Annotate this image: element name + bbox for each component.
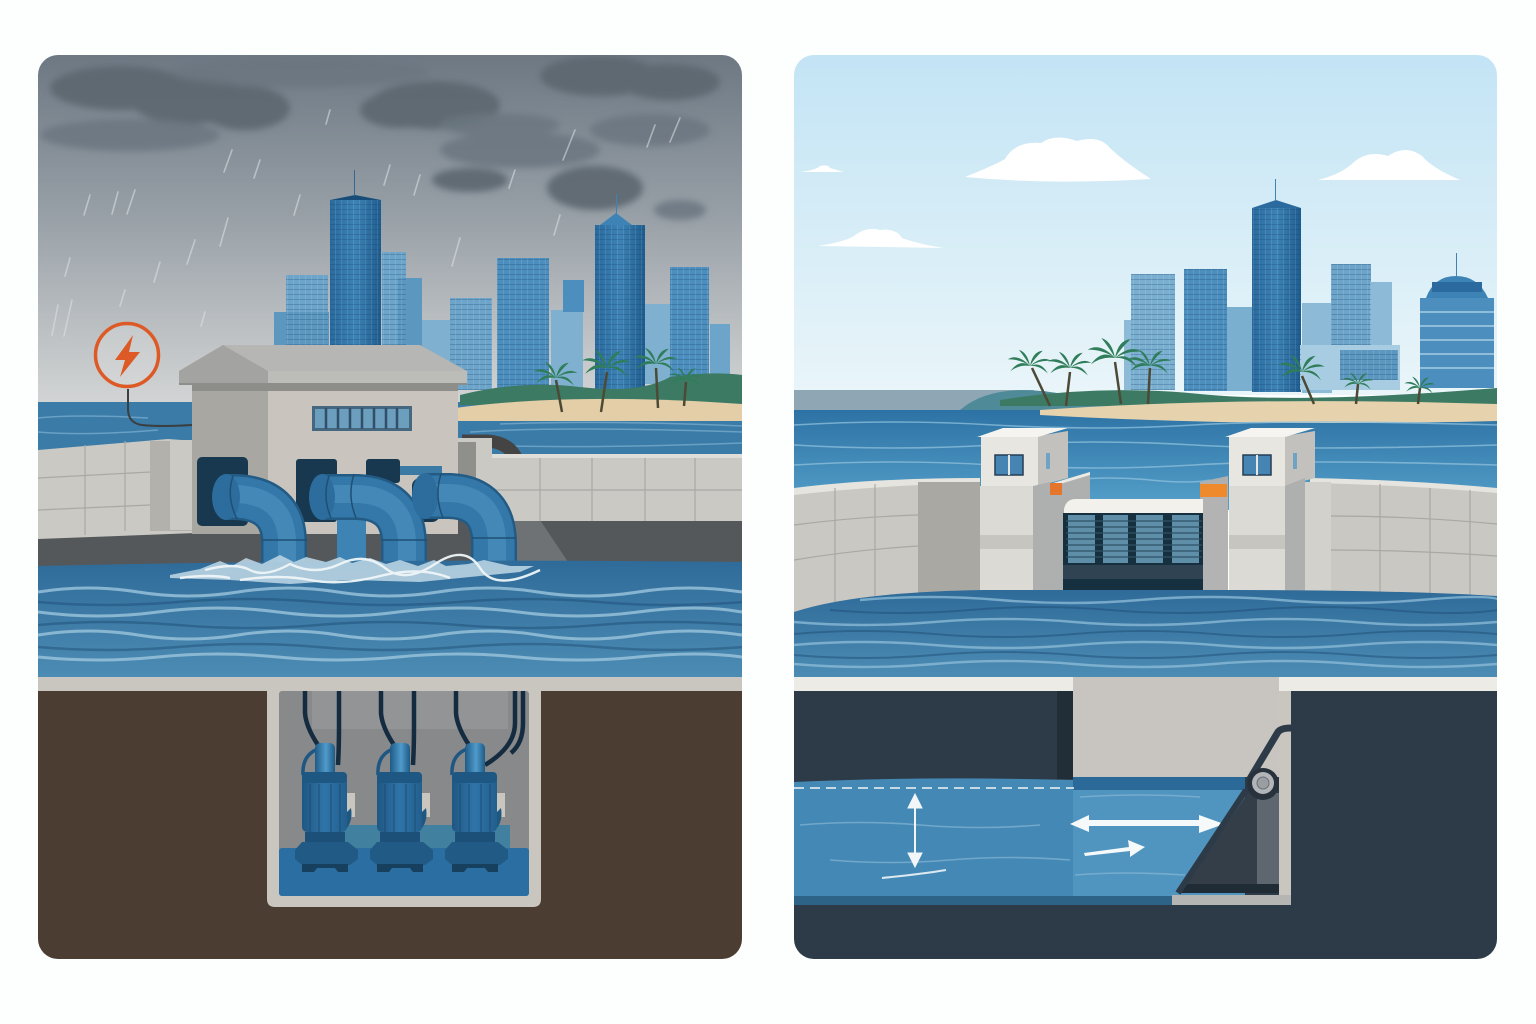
left sea wall	[38, 439, 196, 539]
city skyline	[1124, 179, 1494, 393]
tilting flap gate	[1172, 691, 1291, 905]
stormy sky	[38, 55, 742, 405]
submersible pump 3	[445, 743, 508, 872]
dark pipe openings	[197, 457, 440, 526]
discharge pipes	[212, 473, 516, 571]
pump cables	[305, 691, 523, 765]
front water	[38, 561, 742, 677]
left curved sea wall	[794, 485, 918, 612]
palm trees	[534, 348, 702, 412]
underground channel water	[794, 777, 1245, 905]
sea chop behind station	[38, 416, 742, 447]
icon: power warning	[96, 324, 192, 426]
discharge elbow behind station	[462, 441, 518, 463]
horizon hills	[794, 390, 1034, 412]
concrete block	[1073, 677, 1279, 777]
waves	[38, 588, 742, 660]
white clouds	[800, 137, 1460, 248]
sea	[794, 410, 1497, 510]
panel: storm pump station	[38, 55, 744, 959]
underground	[794, 677, 1497, 959]
tree line and beach	[460, 373, 742, 405]
sluice gate	[1063, 499, 1203, 595]
storm clouds	[40, 56, 720, 220]
louvre vent	[312, 406, 412, 431]
sea chop	[794, 422, 1497, 482]
right curved sea wall	[1331, 484, 1497, 596]
ground	[38, 677, 742, 959]
embankment base	[38, 520, 742, 566]
rain streaks	[52, 110, 680, 336]
palm trees	[1008, 338, 1435, 406]
submersible pump 1	[295, 743, 358, 872]
arrow: water level	[908, 794, 922, 867]
surface foam	[170, 555, 534, 584]
gate piers and wings	[1050, 472, 1228, 597]
right gate tower	[1200, 428, 1315, 602]
left gate tower	[977, 428, 1068, 600]
sump pit	[267, 691, 541, 907]
right sea wall	[458, 438, 492, 486]
panel: tidal gate	[794, 55, 1500, 959]
arrow: two-way flow	[1070, 815, 1224, 833]
waves	[794, 597, 1500, 667]
clear sky	[794, 55, 1497, 395]
front water	[794, 590, 1497, 677]
tree line and beach	[1000, 388, 1497, 406]
pump house	[179, 345, 467, 534]
distant sea	[38, 402, 742, 454]
submersible pump 2	[370, 743, 433, 872]
arrow: inflow	[1084, 840, 1145, 857]
city skyline	[274, 170, 730, 390]
